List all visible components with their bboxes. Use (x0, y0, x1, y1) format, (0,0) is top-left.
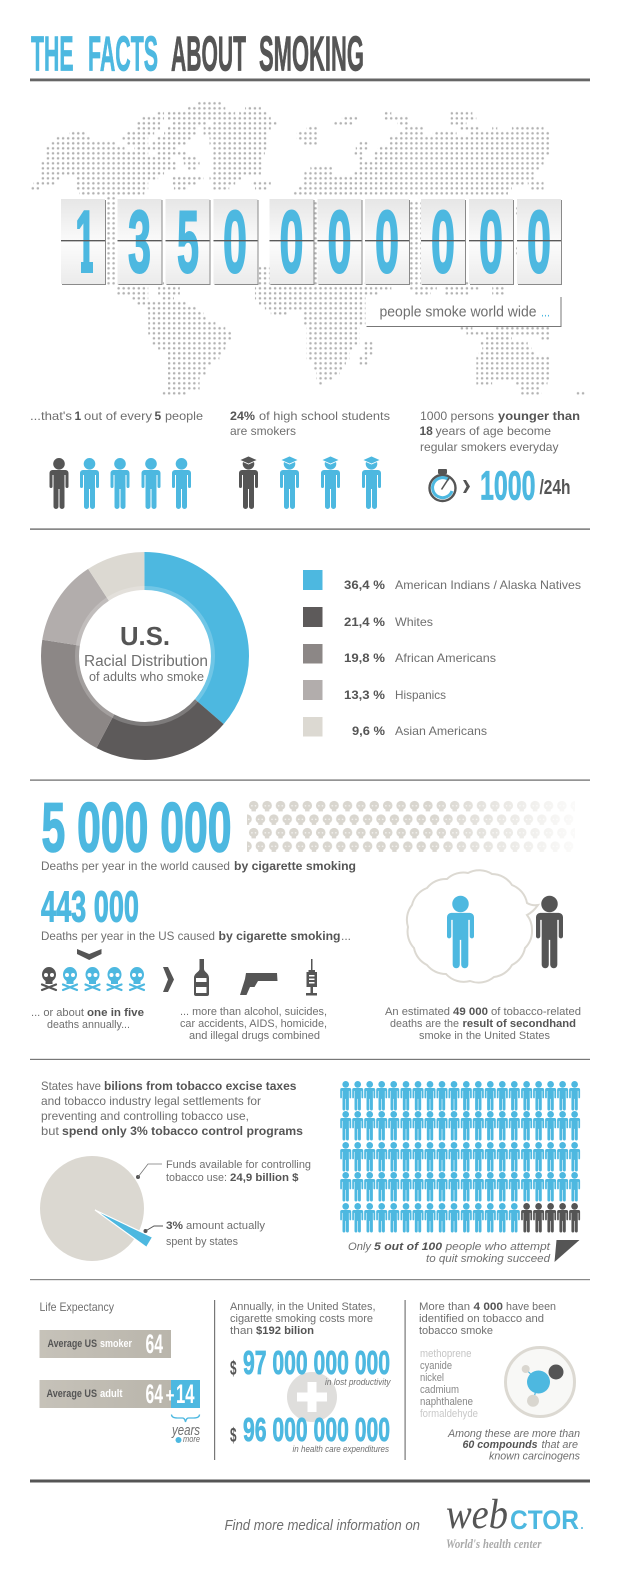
footer text: Find more medical information on (224, 1518, 420, 1534)
secondhand smoke: speech cloud with two people (407, 870, 563, 983)
icon: pistol (240, 973, 278, 995)
legend: racial distribution: Asian Americans (395, 724, 487, 738)
years more: years (171, 1422, 200, 1439)
icon: syringe (306, 959, 317, 996)
text: states have billions: States have (41, 1079, 101, 1093)
icon: bottle (194, 959, 209, 996)
flip counter: 1 350 000 000 (61, 199, 562, 285)
stat: 5 000 000 deaths: 5 000 000 (42, 788, 232, 866)
compounds text: More than (419, 1301, 470, 1313)
text: high school students: of high school students (259, 409, 390, 423)
text: states have billions: but (41, 1124, 60, 1138)
text: high school students: are smokers (230, 424, 296, 438)
flip counter: 1 350 000 000: 1 (75, 192, 96, 291)
smoking costs: 96 000 000 000 (243, 1411, 390, 1448)
years more: more (183, 1434, 200, 1444)
caption: 60 compounds: 60 compounds (462, 1439, 538, 1451)
text: states have billions: spend only 3% tobacco control programs (62, 1124, 303, 1138)
caption: 60 compounds: known carcinogens (489, 1450, 580, 1462)
compound list: nickel (420, 1372, 444, 1384)
legend: racial distribution: 9,6 % (352, 724, 385, 738)
plus circle (287, 1372, 337, 1422)
legend: racial distribution: 19,8 % (344, 651, 385, 665)
text: 1 out of every 5 people: ...that's (30, 409, 72, 423)
flip counter: 1 350 000 000: 0 (479, 192, 503, 291)
compounds text: 4 000 (474, 1301, 503, 1313)
text: high school students (230, 409, 390, 438)
caption: 60 compounds (447, 1428, 580, 1462)
caption: secondhand smoke: smoke in the United States (419, 1030, 550, 1042)
compound list: methoprene (420, 1348, 472, 1360)
bar: average US adult: + (166, 1385, 174, 1407)
dotted world map (30, 103, 585, 393)
life expectancy (40, 1300, 200, 1444)
callout: funds available: 24,9 billion $ (230, 1172, 299, 1184)
donut centre label: Racial Distribution (84, 653, 208, 670)
logo: webCTOR: CTOR (510, 1505, 579, 1535)
caption: one in five: ... or about (31, 1007, 85, 1019)
smoking costs: $ (230, 1358, 236, 1380)
title: ABOUT (171, 28, 246, 82)
callout: funds available: Funds available for controlling (166, 1159, 311, 1171)
text: 1000 persons younger than 18 (420, 409, 580, 454)
compounds text (419, 1301, 556, 1337)
compound list (420, 1348, 478, 1420)
smoking costs (230, 1301, 392, 1455)
chevron down (77, 949, 102, 960)
donut centre label: U.S. (120, 621, 170, 651)
stat: 1000 per 24h: /24h (540, 477, 570, 499)
text: states have billions (41, 1079, 303, 1138)
flip counter: 1 350 000 000: 0 (527, 192, 551, 291)
bar: average US adult: 14 (176, 1379, 194, 1409)
smoking costs: $192 bilion (256, 1325, 314, 1337)
donut chart: racial distribution (60, 571, 230, 741)
callout: 3% spent: 3% (166, 1220, 183, 1232)
legend: racial distribution: Hispanics (395, 688, 446, 702)
callout: 3% spent: amount actually (186, 1220, 265, 1232)
title: FACTS (88, 28, 158, 82)
text: 1000 persons younger than 18: 1000 persons (420, 409, 494, 423)
smoking costs: Annually, in the United States, (230, 1301, 376, 1313)
caption: one in five: one in five (87, 1007, 144, 1019)
chevron right (163, 967, 174, 992)
corner triangle (554, 1240, 580, 1262)
callout: people smoke world wide: people smoke world wide (380, 304, 536, 320)
text: 1000 persons younger than 18: years of age become (436, 424, 551, 438)
bar: average US smoker: 64 (146, 1329, 163, 1359)
smoking costs: in health care expenditures (292, 1444, 389, 1455)
caption: secondhand smoke: 49 000 (453, 1006, 488, 1018)
text: 1 out of every 5 people: 5 (154, 409, 162, 423)
compounds text: have been (506, 1301, 556, 1313)
compound list: formaldehyde (420, 1408, 478, 1420)
flip counter: 1 350 000 000: 0 (375, 192, 399, 291)
caption: only 5 out of 100: Only (348, 1241, 372, 1253)
callout: people smoke world wide: ... (541, 304, 550, 320)
text: states have billions: preventing and controlling tobacco use, (41, 1109, 249, 1123)
caption: only 5 out of 100: to quit smoking succeed (426, 1253, 551, 1265)
caption: one in five (31, 1007, 144, 1031)
icons: four students with caps (239, 456, 381, 509)
caption: secondhand smoke: result of secondhand (462, 1018, 576, 1030)
caption: more than alcohol: car accidents, AIDS, homicide, (180, 1018, 327, 1030)
brace (172, 1414, 200, 1422)
callout: people smoke world wide (366, 296, 562, 327)
legend: racial distribution: 13,3 % (344, 688, 385, 702)
flip counter: 1 350 000 000: 0 (431, 192, 455, 291)
text: 1 out of every 5 people: 1 (74, 409, 82, 423)
legend: racial distribution: Whites (395, 615, 433, 629)
title: THE (31, 28, 74, 82)
text: high school students: 24% (230, 409, 255, 423)
caption: only 5 out of 100: people who attempt (444, 1241, 551, 1253)
caption: one in five: deaths annually... (47, 1019, 130, 1031)
flip counter: 1 350 000 000: 0 (280, 192, 304, 291)
caption: 60 compounds: Among these are more than (447, 1428, 580, 1440)
stat: 1000 per 24h: 1000 (480, 462, 536, 508)
text: 1000 persons younger than 18: younger than (498, 409, 580, 423)
compound list: cyanide (420, 1360, 452, 1372)
flip counter: 1 350 000 000: 5 (177, 192, 199, 291)
legend: racial distribution: American Indians / Alaska Natives (395, 578, 581, 592)
callout: funds available: tobacco use: (166, 1172, 227, 1184)
donut centre label (84, 621, 208, 684)
icon: stopwatch (430, 469, 456, 501)
smoking costs: $ (230, 1425, 236, 1447)
caption: 60 compounds: that are (542, 1439, 578, 1451)
stat: 5 000 000 deaths: Deaths per year in the world caused (41, 859, 230, 873)
text: 1 out of every 5 people: out of every (84, 409, 152, 423)
bar: average US adult: 64 (146, 1379, 163, 1409)
text: 1000 persons younger than 18: 18 (420, 424, 433, 438)
caption: secondhand smoke: of tobacco-related (491, 1006, 581, 1018)
text: states have billions: and tobacco industry legal settlements for (41, 1094, 261, 1108)
stat: 443 000 US deaths: ... (341, 929, 351, 943)
text: SMOKING (259, 28, 364, 82)
chevron right (463, 480, 470, 493)
text: 1 out of every 5 people (30, 409, 203, 423)
title (31, 28, 364, 82)
stat: 443 000 US deaths: Deaths per year in the US caused (41, 929, 215, 943)
logo: webCTOR: web (446, 1492, 508, 1538)
caption: more than alcohol (180, 1006, 327, 1042)
bar: average US smoker (40, 1329, 171, 1359)
life expectancy: Life Expectancy (40, 1300, 114, 1314)
stat: 443 000 US deaths (41, 884, 351, 943)
callout: 3% spent: spent by states (166, 1236, 238, 1248)
caption: only 5 out of 100: 5 out of 100 (374, 1241, 443, 1253)
skull field (247, 800, 577, 854)
smoking costs: than (230, 1325, 253, 1337)
compound list: cadmium (420, 1384, 459, 1396)
logo: webCTOR (446, 1492, 583, 1551)
text: 1 out of every 5 people: people (165, 409, 203, 423)
bar: average US smoker: Average US (48, 1338, 97, 1350)
stat: 443 000 US deaths: by cigarette smoking (218, 929, 340, 943)
bar: average US smoker: smoker (100, 1338, 133, 1350)
flip counter: 1 350 000 000: 0 (328, 192, 352, 291)
caption: more than alcohol: and illegal drugs combined (189, 1030, 320, 1042)
stat: 5 000 000 deaths: by cigarette smoking (234, 859, 356, 873)
compounds text: tobacco smoke (419, 1325, 493, 1337)
legend: racial distribution: African Americans (395, 651, 496, 665)
caption: secondhand smoke: deaths are the (390, 1018, 459, 1030)
years more (171, 1422, 200, 1444)
caption: secondhand smoke (385, 1006, 581, 1042)
text: states have billions: bilions from tobacco excise taxes (104, 1079, 297, 1093)
text: 1000 persons younger than 18: regular smokers everyday (420, 440, 558, 454)
flip counter: 1 350 000 000: 3 (128, 192, 151, 291)
logo: webCTOR: World's health center (446, 1537, 542, 1551)
compounds text: identified on tobacco and (419, 1313, 544, 1325)
bar: average US adult (40, 1379, 200, 1409)
smoking costs: 97 000 000 000 (243, 1344, 390, 1381)
stat: 443 000 US deaths: 443 000 (41, 884, 139, 932)
donut centre label: of adults who smoke (89, 669, 204, 684)
smoking costs: cigarette smoking costs more (230, 1313, 373, 1325)
legend: racial distribution: 21,4 % (344, 615, 385, 629)
caption: only 5 out of 100 (348, 1241, 551, 1265)
pie chart: funds vs spent (40, 1156, 152, 1261)
molecule icon (506, 1348, 574, 1416)
callout: funds available (136, 1159, 311, 1184)
bar: average US adult: adult (100, 1388, 123, 1400)
callout: 3% spent (144, 1220, 265, 1248)
bar: average US adult: Average US (46, 1388, 97, 1400)
icons: five people, one smoker (50, 458, 191, 509)
flip counter: 1 350 000 000: 0 (223, 192, 247, 291)
people grid: 5 out of 100 (340, 1081, 580, 1232)
legend: racial distribution (303, 570, 581, 738)
caption: secondhand smoke: An estimated (385, 1006, 450, 1018)
icons: five skulls (42, 967, 144, 990)
smoking costs: in lost productivity (325, 1377, 392, 1388)
legend: racial distribution: 36,4 % (344, 578, 385, 592)
caption: more than alcohol: ... more than alcohol, suicides, (180, 1006, 327, 1018)
compound list: naphthalene (420, 1396, 473, 1408)
